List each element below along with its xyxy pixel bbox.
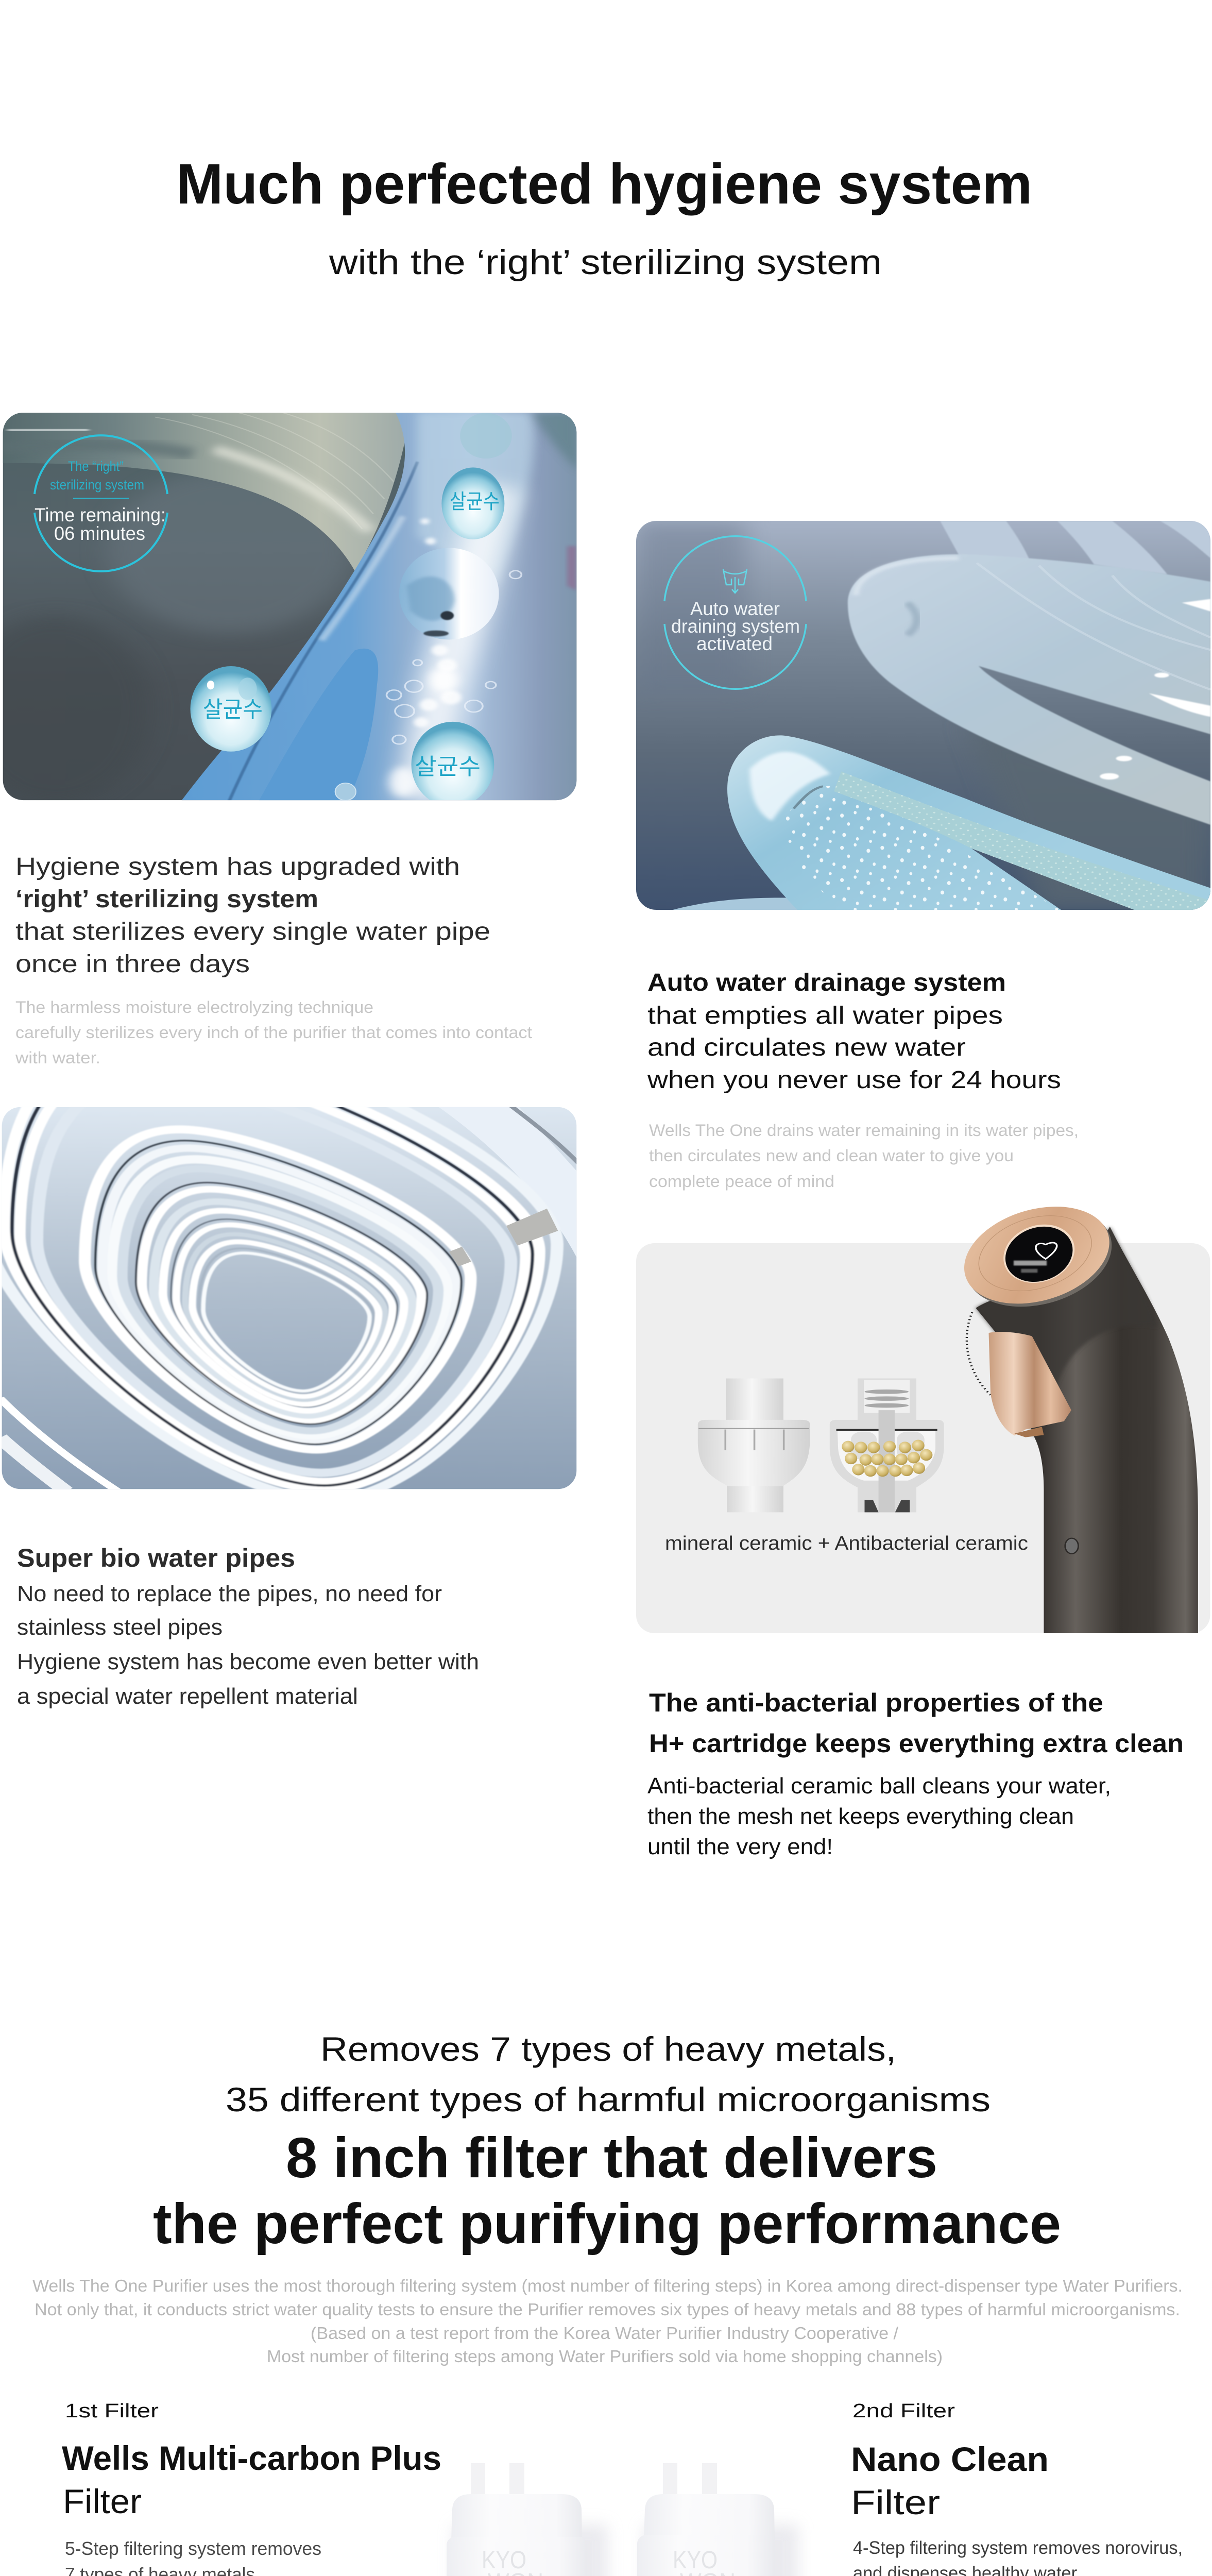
icon: draining basin	[723, 569, 747, 593]
text block: 2nd filter: 4-Step filtering system removes norovirus,	[853, 2538, 1183, 2558]
callout: sterilizing timer: sterilizing system	[50, 477, 144, 493]
text block: H+ cartridge: Anti-bacterial ceramic ball cleans your water,	[647, 1773, 1111, 1799]
text block: right sterilizing: ‘right’ sterilizing system	[15, 886, 318, 913]
callout: auto drain: Auto water	[690, 598, 780, 619]
icon: mineral ceramic cartridge	[698, 1379, 810, 1512]
text block: 1st filter: 5-Step filtering system removes	[65, 2538, 321, 2559]
text block: filter intro: Not only that, it conducts strict water quality tests to ensure the Purifier removes six types of heavy metals and 88 types of harmful microorganisms.	[35, 2300, 1180, 2319]
text block: auto drainage: Auto water drainage system	[647, 969, 1006, 996]
text block: H+ cartridge	[647, 1688, 1184, 1859]
text block: filter intro	[32, 2276, 1183, 2366]
text block: auto drainage	[647, 969, 1061, 1094]
panel: ceramic cartridge and faucet	[636, 1187, 1210, 1633]
text block: 2nd filter: Nano Clean	[851, 2440, 1049, 2478]
callout: auto drain: draining system	[671, 616, 800, 637]
text block: H+ cartridge: then the mesh net keeps everything clean	[647, 1804, 1074, 1829]
text block: 1st filter: Wells Multi-carbon Plus	[62, 2439, 441, 2477]
text block: electrolyzing note: with water.	[15, 1048, 100, 1067]
product: nano clean filter cartridge: KYO	[673, 2547, 718, 2574]
text block: electrolyzing note: carefully sterilizes every inch of the purifier that comes into contact	[15, 1023, 532, 1042]
text block: drainage note: Wells The One drains water remaining in its water pipes,	[649, 1121, 1079, 1140]
product: multi-carbon filter cartridge	[447, 2463, 608, 2576]
callout: auto drain	[664, 536, 806, 689]
text block: filter intro: Wells The One Purifier uses the most thorough filtering system (most number of filtering steps) in Korea among direct-dispenser type Water Purifiers.	[32, 2276, 1183, 2295]
product: nano clean filter cartridge	[637, 2463, 798, 2576]
text block: auto drainage: that empties all water pipes	[647, 1002, 1003, 1029]
text block: 1st filter: Filter	[63, 2482, 142, 2520]
text block: drainage note: then circulates new and clean water to give you	[649, 1146, 1014, 1165]
callout: sterilizing timer: 06 minutes	[54, 523, 145, 544]
text block: auto drainage: and circulates new water	[647, 1034, 966, 1061]
callout: sterilizing timer: The “right”	[68, 459, 124, 474]
text block: H+ cartridge: H+ cartridge keeps everything extra clean	[649, 1729, 1184, 1758]
text block: super bio pipes: Super bio water pipes	[17, 1544, 295, 1572]
text block: electrolyzing note	[15, 998, 532, 1067]
label: water bubble: 살균수	[415, 754, 481, 779]
panel: drainage image	[636, 521, 1210, 910]
text block: right sterilizing: once in three days	[15, 951, 250, 978]
text block: H+ cartridge: The anti-bacterial properties of the	[649, 1688, 1103, 1717]
text block: 2nd filter: 2nd Filter	[852, 2400, 955, 2422]
callout: sterilizing timer	[35, 435, 167, 571]
text block: super bio pipes: No need to replace the pipes, no need for	[17, 1581, 442, 1606]
section heading: filter: the perfect purifying performance	[153, 2192, 1061, 2256]
label: water bubble: 살균수	[450, 490, 500, 513]
text block: 2nd filter	[851, 2400, 1199, 2576]
caption: ceramic names: mineral ceramic + Antibacterial ceramic	[665, 1533, 1028, 1554]
panel: sterilizing image	[0, 412, 579, 807]
text block: right sterilizing: that sterilizes every single water pipe	[15, 918, 490, 945]
text block: filter intro: Most number of filtering steps among Water Purifiers sold via home shopping channels)	[267, 2347, 943, 2366]
callout: sterilizing timer: Time remaining:	[35, 504, 166, 526]
product: multi-carbon filter cartridge: KYO	[482, 2547, 526, 2574]
text block: drainage note: complete peace of mind	[649, 1172, 834, 1191]
text block: filter intro: (Based on a test report from the Korea Water Purifier Industry Cooperative /	[311, 2324, 899, 2343]
icon: antibacterial ceramic cutaway	[830, 1379, 944, 1512]
text block: drainage note	[649, 1121, 1079, 1191]
text block: right sterilizing	[15, 853, 490, 978]
label: water bubble: 살균수	[203, 697, 263, 722]
text block: super bio pipes: Hygiene system has become even better with	[17, 1649, 479, 1674]
callout: auto drain: activated	[696, 633, 773, 654]
section heading: filter: 35 different types of harmful microorganisms	[226, 2080, 991, 2119]
text block: super bio pipes	[17, 1544, 479, 1709]
text block: 2nd filter: Filter	[851, 2483, 940, 2521]
text block: H+ cartridge: until the very end!	[647, 1834, 833, 1859]
title: Much perfected hygiene system	[176, 152, 1032, 216]
text block: super bio pipes: stainless steel pipes	[17, 1615, 223, 1640]
section heading: filter: Removes 7 types of heavy metals,	[320, 2030, 896, 2068]
icon: faucet	[940, 1187, 1198, 1633]
panel: water pipes image	[2, 1107, 577, 1489]
text block: right sterilizing: Hygiene system has upgraded with	[15, 853, 460, 880]
section heading: filter: 8 inch filter that delivers	[286, 2126, 937, 2190]
section heading: filter	[153, 2030, 1061, 2256]
text block: 1st filter	[62, 2400, 441, 2576]
subtitle: with the ‘right’ sterilizing system	[329, 243, 882, 282]
text block: electrolyzing note: The harmless moisture electrolyzing technique	[15, 998, 373, 1016]
text block: 1st filter: 1st Filter	[65, 2400, 159, 2422]
text block: super bio pipes: a special water repellent material	[17, 1684, 358, 1709]
text block: auto drainage: when you never use for 24 hours	[647, 1066, 1061, 1094]
